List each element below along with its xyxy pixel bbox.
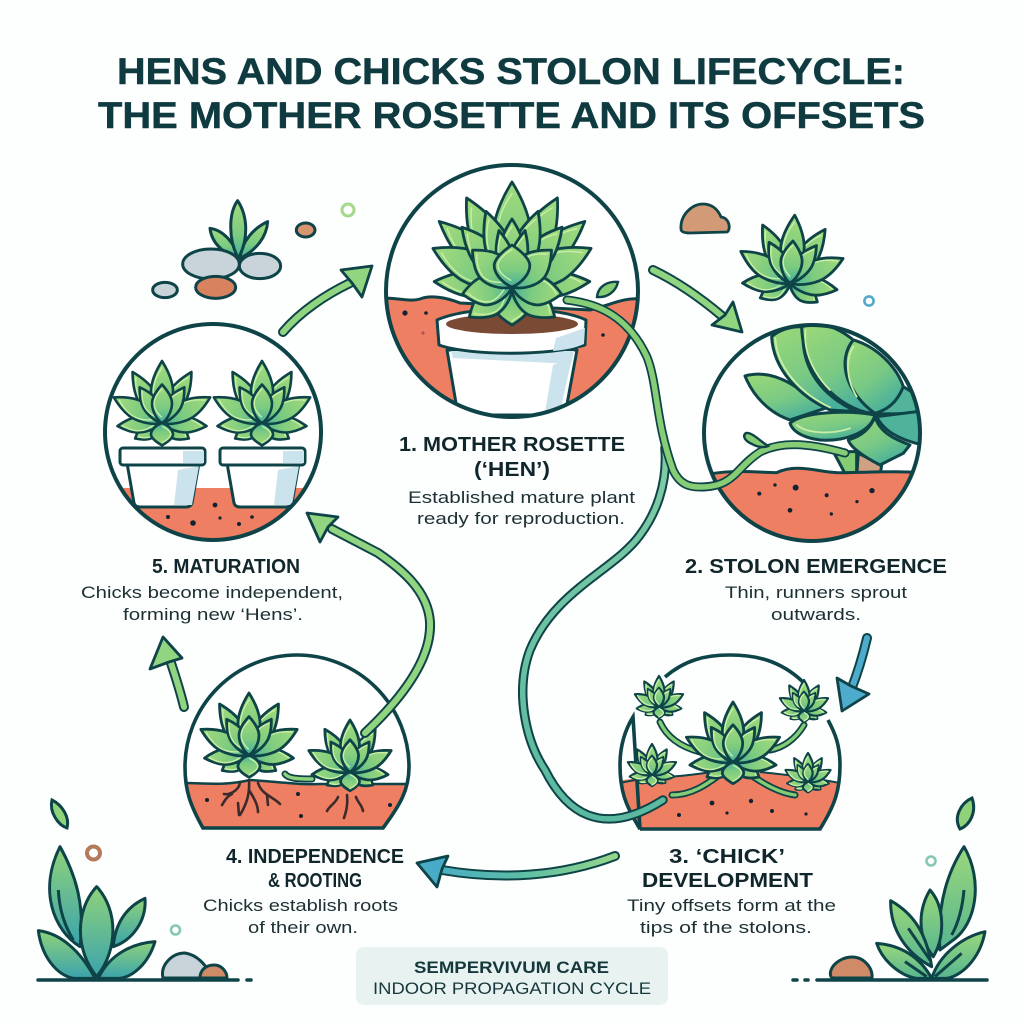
text: step 2: outwards. <box>771 605 861 624</box>
arrow: step 5 to step 1 <box>283 266 372 332</box>
panel: step 5 maturation illustration <box>100 324 330 548</box>
icon: right pot with rosette <box>209 361 315 507</box>
title: HENS AND CHICKS STOLON LIFECYCLE: <box>117 51 905 92</box>
text: step 4: of their own. <box>248 918 358 937</box>
text: step 2: 2. STOLON EMERGENCE <box>685 556 947 578</box>
icon: bottom-right plant <box>877 847 985 978</box>
icon: connecting runner <box>285 774 312 779</box>
text: step 3: 3. ‘CHICK’ <box>669 846 785 868</box>
text: step 3: DEVELOPMENT <box>642 870 813 892</box>
icon: teal ring right <box>926 856 936 866</box>
text: step 1 <box>399 434 635 528</box>
text: step 3: Tiny offsets form at the <box>627 896 836 915</box>
icon: brown ring <box>87 846 100 860</box>
arrow: step 4 to step 5 <box>150 637 184 707</box>
icon: top-right rosette <box>732 211 851 311</box>
icon: ring decoration <box>342 204 354 216</box>
arrow: long stolon from mother to circle 3 <box>523 448 665 819</box>
title: THE MOTHER ROSETTE AND ITS OFFSETS <box>98 95 925 136</box>
text: step 5 <box>81 556 343 624</box>
text: step 3: tips of the stolons. <box>640 918 812 937</box>
icon: chick on stolon tip <box>626 744 678 786</box>
icon: bottom-left plant <box>38 847 155 978</box>
text: step 4: Chicks establish roots <box>203 896 398 915</box>
pot <box>437 309 586 415</box>
icon: bottom-right stone <box>830 957 872 978</box>
icon: small sprout leaf <box>597 282 618 297</box>
text: step 5: 5. MATURATION <box>152 556 300 578</box>
icon: blue ring decoration <box>864 296 874 306</box>
panel: step 4 independence and rooting illustration <box>180 655 415 835</box>
arrow: stolon from mother to circle 2 <box>567 300 845 487</box>
text: step 4: 4. INDEPENDENCE <box>226 846 404 868</box>
arrow: stolon arrow from circle 4 to circle 5 <box>307 513 430 733</box>
panel: step 2 stolon emergence illustration <box>697 325 930 550</box>
text: step 1: ready for reproduction. <box>417 509 625 528</box>
panel: step 1 mother rosette illustration <box>380 165 640 420</box>
footer badge: SEMPERVIVUM CARE <box>414 958 609 977</box>
footer badge <box>356 947 668 1005</box>
icon: roots <box>222 780 363 818</box>
arrow: step 1 to step 2 <box>653 270 742 332</box>
ground line right <box>793 978 987 982</box>
panel: step 3 chick development illustration <box>610 655 850 835</box>
icon: top-right stones <box>681 204 729 233</box>
text: step 1: Established mature plant <box>408 488 635 507</box>
text: step 4: & ROOTING <box>268 870 362 892</box>
icon: bottom-right leaf <box>957 798 974 829</box>
text: step 5: Chicks become independent, <box>81 583 343 602</box>
icon: teal ring <box>171 926 180 934</box>
icon: bottom-left stones <box>163 953 227 978</box>
title <box>98 51 925 136</box>
icon: bottom-left leaf <box>51 800 68 828</box>
text: step 5: forming new ‘Hens’. <box>123 605 303 624</box>
icon: top-left plant and stones <box>153 201 315 298</box>
text: step 2 <box>685 556 947 624</box>
icon: left pot with rosette <box>109 361 215 507</box>
footer badge: INDOOR PROPAGATION CYCLE <box>373 979 651 998</box>
text: step 1: (‘HEN’) <box>474 459 550 481</box>
text: step 1: 1. MOTHER ROSETTE <box>399 434 625 456</box>
arrow: step 2 to step 3 <box>837 638 869 711</box>
text: step 4 <box>203 846 404 937</box>
text: step 2: Thin, runners sprout <box>725 583 907 602</box>
icon: connecting runners <box>660 722 804 795</box>
arrow: step 3 to step 4 <box>417 856 615 887</box>
text: step 3 <box>627 846 836 937</box>
ground line left <box>38 978 251 982</box>
